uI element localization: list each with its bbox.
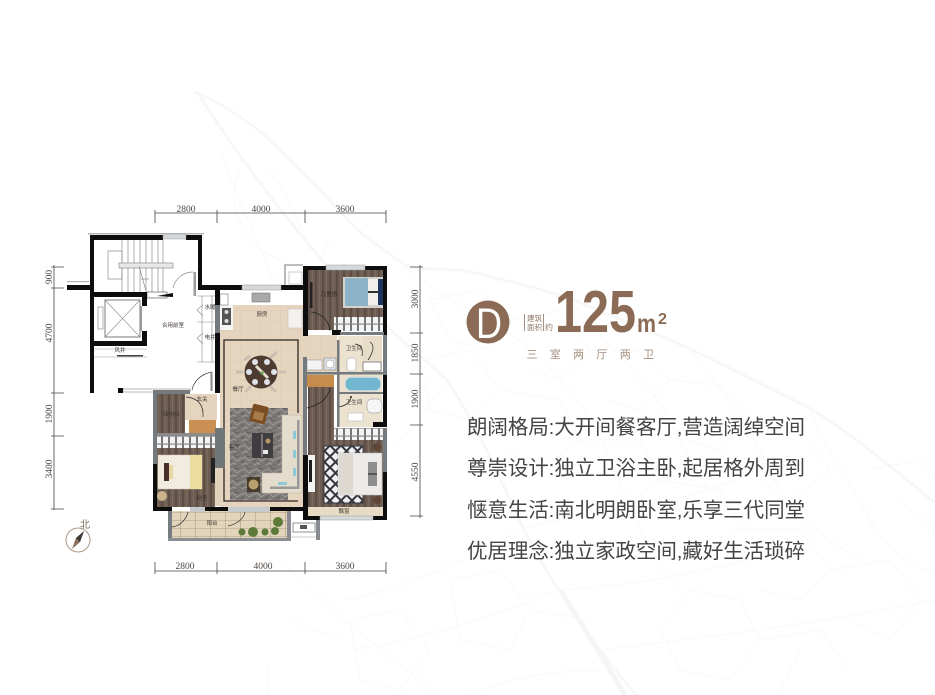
top dimension line [155,205,386,223]
living and dining room: 客厅 [228,443,240,451]
elevator [98,300,142,337]
area label: 面积 [527,322,542,332]
compass [66,519,90,552]
dining table [236,352,286,392]
right dimension line: 4550 [411,462,421,482]
study and third bedroom [157,394,225,507]
living and dining room [220,330,305,508]
coffee table [252,433,273,458]
left dimension line: 4700 [45,323,55,342]
area figure 125 m2: m [637,310,656,338]
kitchen [220,290,303,331]
side table [247,477,260,492]
area figure 125 m2: 125 [555,279,636,345]
south balcony [168,507,291,541]
right dimension line: 3000 [411,289,421,308]
bathrooms and corridor: 卫生间 [346,398,362,406]
stair core and lobby [67,233,216,392]
bathrooms and corridor: 卫生间 [346,344,362,352]
bottom dimension line: 4000 [254,562,273,572]
top dimension line: 3600 [336,205,355,215]
bathrooms and corridor [305,335,382,427]
stair core and lobby: 电井 [204,333,216,341]
area label: 建筑 [527,313,542,323]
armchair [249,403,269,425]
small balconies [285,265,320,540]
left dimension line [45,265,64,510]
gray partition walls [153,305,387,472]
air shaft [94,346,147,357]
second bedroom: 儿童房 [321,290,338,298]
bottom dimension line [155,562,386,574]
right dimension line [410,265,423,518]
bottom dimension line: 2800 [176,562,195,572]
stair core and lobby: 合用前室 [162,321,184,329]
background leaf watermark [195,92,935,695]
area figure 125 m2: 2 [658,311,667,328]
floor plan [45,205,423,574]
rug [230,408,288,500]
study and third bedroom: 卧室 [196,494,208,502]
left dimension line: 900 [45,270,55,284]
left dimension line: 3400 [45,459,55,478]
layout subtitle: 三室两厅两卫 [526,347,666,361]
feature line 1: 朗阔格局:大开间餐客厅,营造阔绰空间 [467,416,805,439]
study and third bedroom: 储物间 [163,410,179,418]
sofa [262,415,302,493]
utility closets [197,296,215,362]
right dimension line: 1850 [411,343,421,362]
master bedroom [307,387,383,516]
kitchen: 厨房 [256,310,268,318]
windows [163,234,373,520]
south balcony: 阳台 [206,519,218,527]
feature list [467,416,805,563]
stair core and lobby: 水暖 [204,303,216,311]
right dimension line: 1900 [411,389,421,408]
study and third bedroom: 玄关 [196,395,208,403]
left dimension line: 1900 [45,404,55,424]
area label: 约 [545,322,553,332]
top dimension line: 2800 [176,205,196,215]
plants [238,517,283,537]
bottom dimension line: 3600 [336,562,355,572]
stairs [108,240,193,292]
living and dining room: 餐厅 [232,385,244,393]
badge: letter D: D [476,300,502,348]
top dimension line: 4000 [252,205,271,215]
feature line 4: 优居理念:独立家政空间,藏好生活琐碎 [467,539,805,563]
compass: 北 [80,519,90,531]
master bedroom: 飘窗 [338,507,350,515]
feature line 3: 惬意生活:南北明朗卧室,乐享三代同堂 [467,499,805,522]
second bedroom [308,270,383,331]
walls [67,235,387,520]
area label [524,313,553,332]
air shaft: 风井 [114,346,126,354]
feature line 2: 尊崇设计:独立卫浴主卧,起居格外周到 [467,457,805,480]
